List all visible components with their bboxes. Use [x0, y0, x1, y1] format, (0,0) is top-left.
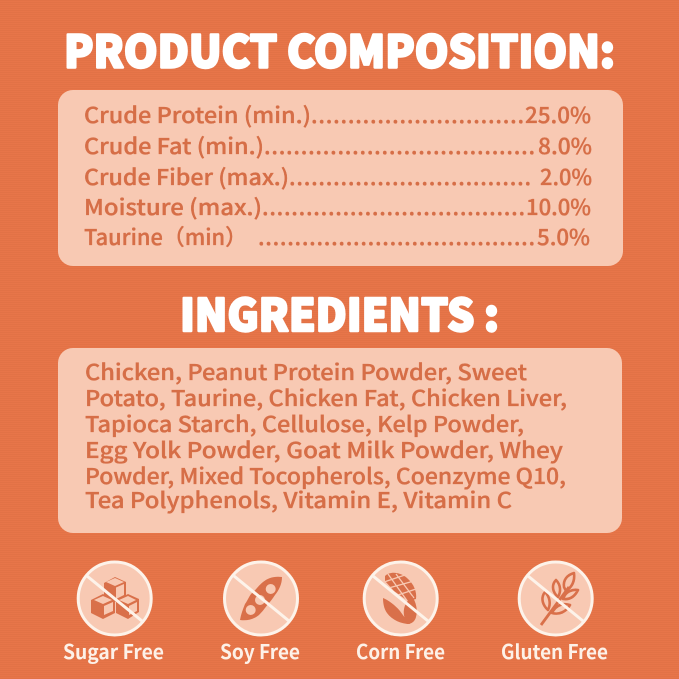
ingredients text: Potato, Taurine, Chicken Fat, Chicken Liver, — [85, 381, 567, 413]
heading: ingredients: INGREDIENTS : — [180, 280, 499, 344]
row: crude fiber: Crude Fiber (max.) — [84, 160, 289, 192]
ingredients text: Chicken, Peanut Protein Powder, Sweet — [85, 355, 527, 387]
icon: sugar cubes — [91, 577, 139, 619]
label: Soy Free — [220, 636, 300, 665]
row: moisture: 10.0% — [526, 190, 591, 222]
row: taurine: ...................................... — [258, 220, 535, 252]
row: crude protein: 25.0% — [525, 98, 591, 130]
icon: corn cob — [383, 573, 417, 624]
row: taurine — [84, 220, 590, 252]
row: moisture: Moisture (max.) — [84, 190, 262, 222]
row: taurine: Taurine（min） — [84, 220, 247, 252]
no-symbol slash — [87, 576, 142, 621]
no-symbol slash — [528, 576, 583, 621]
ingredients text: Tea Polyphenols, Vitamin E, Vitamin C — [85, 483, 512, 515]
ingredients text: Powder, Mixed Tocopherols, Coenzyme Q10, — [85, 459, 566, 491]
row: crude protein — [84, 98, 591, 130]
panel: ingredients list — [58, 348, 622, 533]
row: moisture — [84, 190, 591, 222]
panel: composition table — [58, 90, 623, 266]
row: taurine: 5.0% — [537, 220, 590, 252]
row: crude protein: Crude Protein (min.) — [84, 98, 311, 130]
row: crude fiber — [84, 160, 592, 192]
row: crude fiber: 2.0% — [540, 160, 592, 192]
badge: soy free — [220, 562, 300, 665]
no-symbol slash — [373, 576, 428, 621]
label: Gluten Free — [501, 636, 608, 665]
icon: soybean pod — [240, 577, 282, 620]
badge: corn free — [356, 562, 445, 665]
label: Sugar Free — [63, 636, 164, 665]
label: Corn Free — [356, 636, 445, 665]
ingredients text — [85, 355, 567, 515]
ingredients text: Egg Yolk Powder, Goat Milk Powder, Whey — [85, 433, 563, 465]
badge: sugar free — [63, 562, 164, 665]
row: crude fat: ..................................... — [264, 129, 535, 161]
row: crude fat — [84, 129, 592, 161]
ingredients text: Tapioca Starch, Cellulose, Kelp Powder, — [85, 407, 524, 439]
title: product composition: PRODUCT COMPOSITION: — [64, 16, 615, 80]
row: crude fiber: ................................. — [289, 160, 531, 192]
icon: wheat — [541, 573, 578, 625]
row: crude fat: Crude Fat (min.) — [84, 129, 264, 161]
badge: gluten free — [501, 562, 608, 665]
row: crude fat: 8.0% — [538, 129, 592, 161]
row: moisture: .................................... — [262, 190, 525, 222]
no-symbol slash — [234, 576, 289, 621]
row: crude protein: ............................. — [311, 98, 524, 130]
